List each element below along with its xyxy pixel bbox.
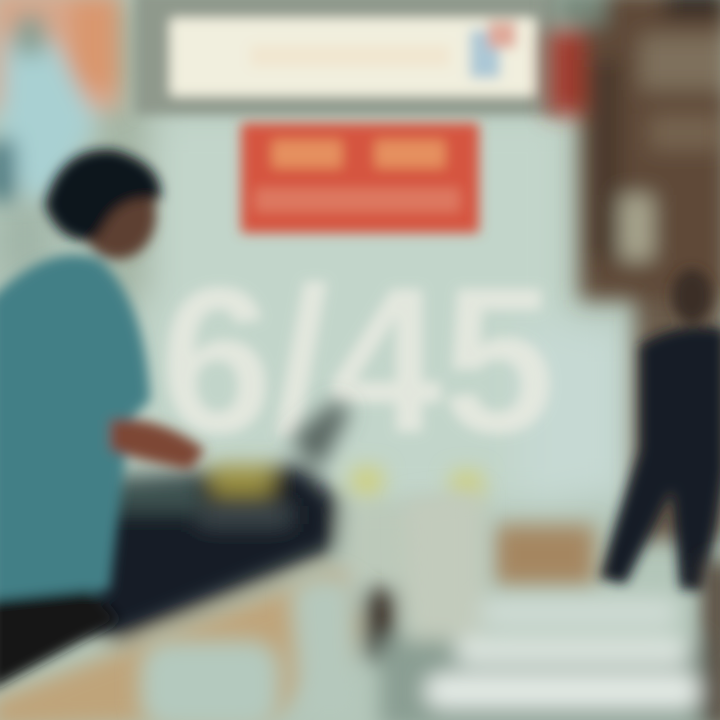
- counter and machine: [0, 400, 595, 720]
- right figure: [598, 269, 720, 590]
- wall shading: [0, 0, 630, 510]
- top sign frame: [135, 0, 560, 115]
- left figure: [0, 150, 205, 690]
- papers and foreground: [140, 490, 720, 720]
- poster top left: [0, 0, 120, 200]
- red sign: [241, 123, 479, 233]
- large numbers: 6/45: [160, 245, 555, 477]
- right background: [548, 0, 720, 540]
